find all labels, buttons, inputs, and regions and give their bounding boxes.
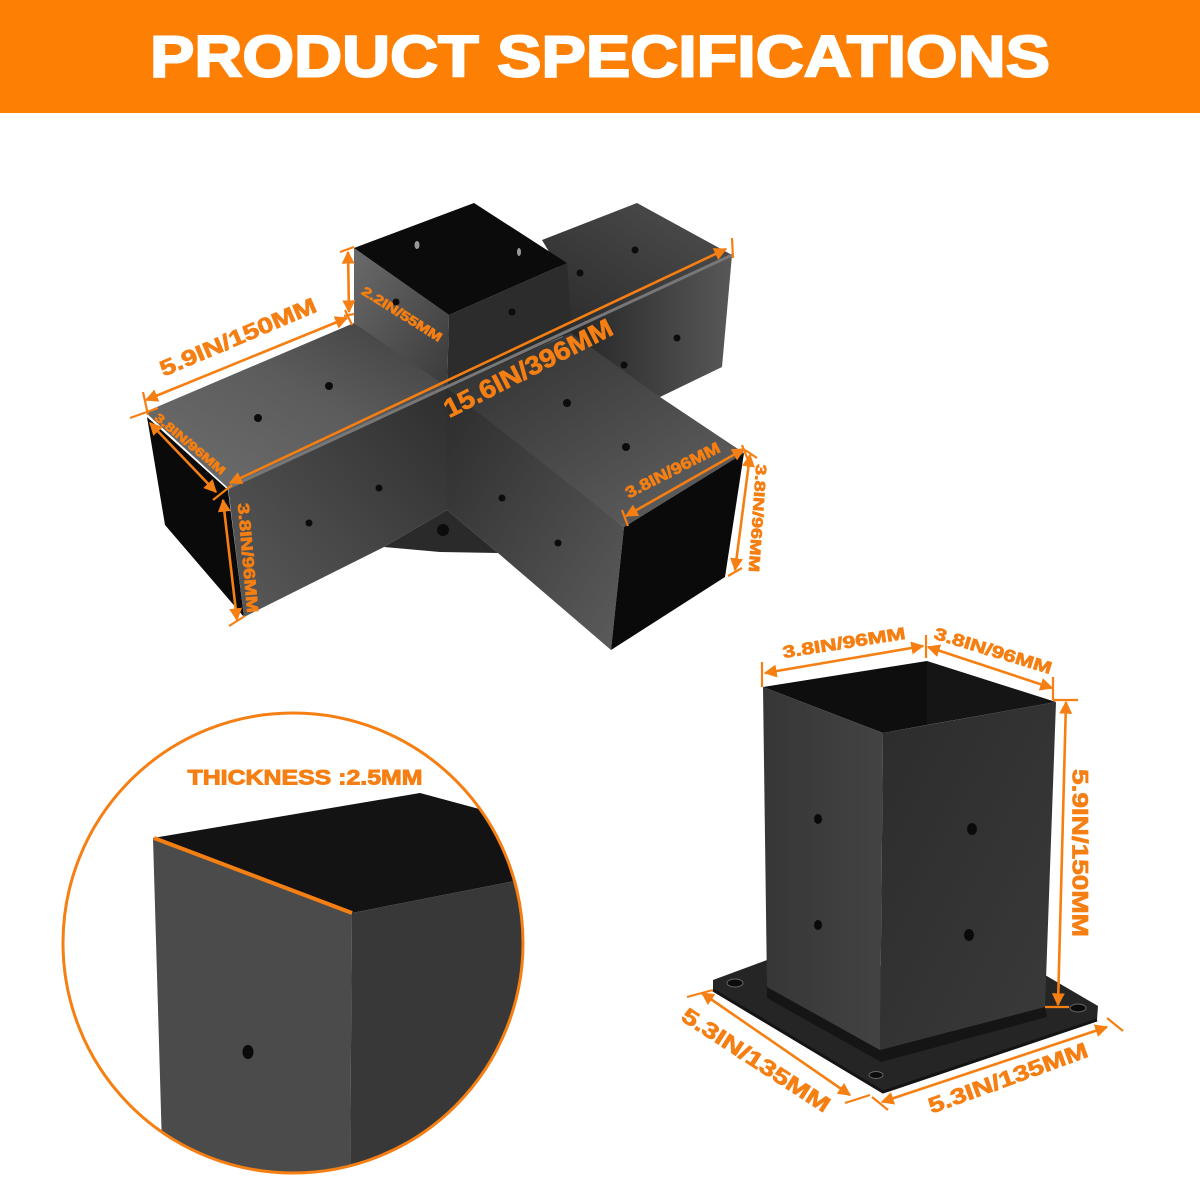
dimension: top right width: 3.8IN/96MM — [932, 624, 1054, 678]
dimension: top left width: 3.8IN/96MM — [781, 624, 907, 662]
dimension: 3.8IN/96MM left top: 3.8IN/96MM — [152, 410, 228, 478]
base plate holes — [727, 979, 743, 987]
panel: thickness detail circle — [63, 713, 530, 1180]
dimension: 2.2IN/55MM — [340, 247, 445, 345]
base plate — [713, 960, 1098, 1092]
left arm — [145, 323, 447, 617]
dimension: 3.8IN/96MM front: 3.8IN/96MM — [623, 440, 723, 502]
dimension: height: 5.9IN/150MM — [1068, 769, 1092, 937]
dimension: 5.9IN/150MM: 5.9IN/150MM — [156, 293, 320, 381]
post holes — [814, 814, 977, 941]
rivet hole — [242, 1045, 254, 1059]
ridge highlight — [228, 255, 732, 488]
dimension: 3.8IN/96MM left top — [130, 408, 232, 500]
dimension: 15.6IN/396MM — [230, 238, 733, 483]
post left face — [763, 687, 883, 1050]
post right face — [880, 702, 1056, 1050]
post socket opening — [763, 661, 1056, 733]
thickness label: THICKNESS :2.5MM — [188, 766, 422, 790]
top socket — [354, 203, 572, 390]
right face — [350, 882, 522, 1164]
lower gusset plate — [384, 510, 498, 553]
panel: post base bracket — [677, 624, 1123, 1118]
left face — [153, 838, 352, 1180]
socket interior — [153, 793, 530, 913]
panel: four-way cross bracket — [130, 203, 769, 650]
dimension: top left width — [762, 624, 926, 687]
dimension: 3.8IN/96MM right vertical — [728, 450, 769, 576]
dimension: 3.8IN/96MM left vertical — [223, 500, 260, 626]
dimension: 3.8IN/96MM left vertical: 3.8IN/96MM — [234, 502, 260, 614]
mounting holes — [254, 241, 680, 546]
circle outline — [63, 713, 523, 1173]
right arm — [542, 203, 732, 397]
dimension: 3.8IN/96MM right vertical: 3.8IN/96MM — [745, 464, 769, 572]
dimension: base right — [872, 1018, 1123, 1118]
dimension: height — [1045, 700, 1092, 1007]
dimension: 5.9IN/150MM — [143, 293, 352, 415]
title: PRODUCT SPECIFICATIONS — [150, 24, 1050, 90]
dimension: top right width — [928, 624, 1054, 700]
title banner — [0, 0, 1200, 113]
dimension: base left — [677, 990, 870, 1117]
dimension: 15.6IN/396MM: 15.6IN/396MM — [438, 312, 618, 424]
dimension: 3.8IN/96MM front — [622, 440, 748, 526]
front arm — [447, 333, 744, 650]
dimension: 2.2IN/55MM: 2.2IN/55MM — [359, 283, 445, 345]
dimension: base right: 5.3IN/135MM — [925, 1038, 1091, 1118]
dimension: base left: 5.3IN/135MM — [677, 1003, 835, 1117]
thickness marker line — [154, 838, 352, 913]
